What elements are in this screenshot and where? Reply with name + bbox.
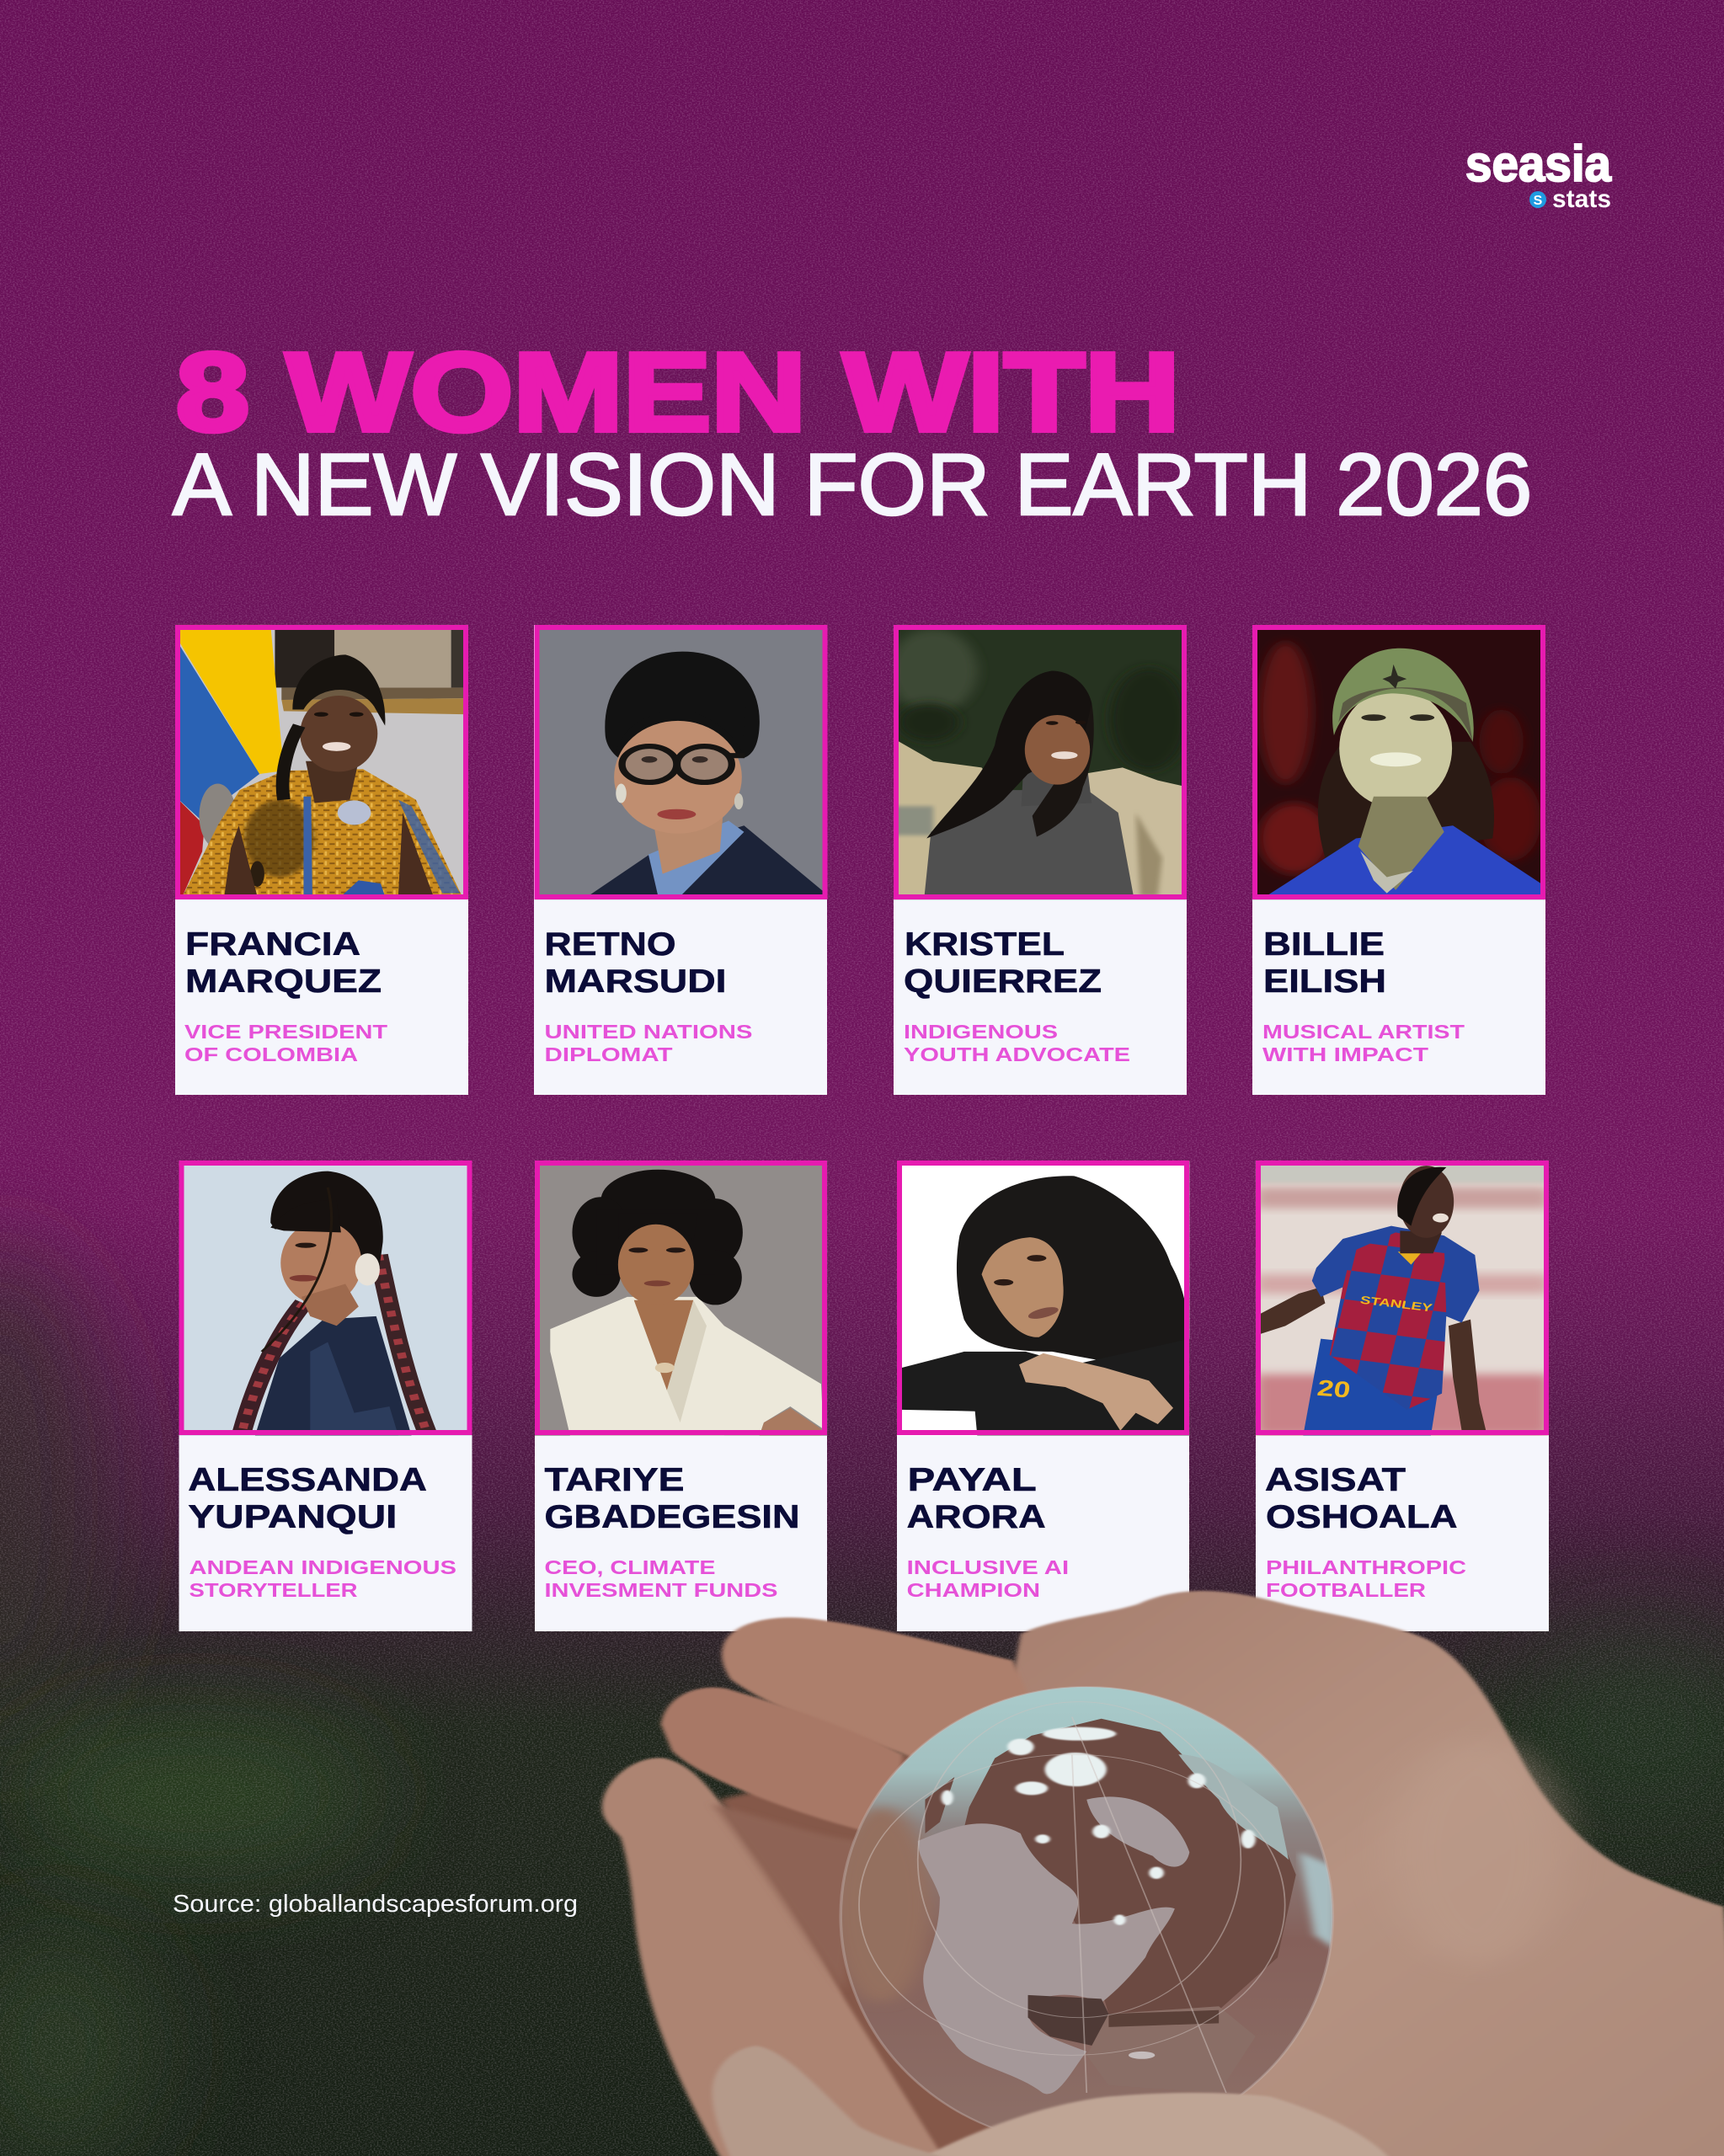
icon: lower palm over globe xyxy=(925,2093,1388,2156)
role line 2: OF COLOMBIA xyxy=(184,1043,358,1065)
role: INCLUSIVE AI xyxy=(907,1556,1069,1578)
role line 2: CHAMPION xyxy=(907,1579,1040,1601)
surname: MARQUEZ xyxy=(185,963,382,1000)
role line 2: STORYTELLER xyxy=(189,1579,358,1601)
name: FRANCIA xyxy=(185,926,360,963)
role: CEO, CLIMATE xyxy=(544,1556,716,1578)
logo: seasia stats: stats xyxy=(1552,185,1611,213)
name: PAYAL xyxy=(908,1462,1037,1498)
surname: OSHOALA xyxy=(1266,1499,1457,1535)
logo: seasia stats: S xyxy=(1534,194,1543,208)
role: UNITED NATIONS xyxy=(544,1021,753,1043)
role: PHILANTHROPIC xyxy=(1266,1556,1466,1578)
icon: glass globe xyxy=(830,1687,1337,2145)
surname: EILISH xyxy=(1263,963,1386,1000)
card: Francia Marquez xyxy=(175,625,469,1095)
role: MUSICAL ARTIST xyxy=(1262,1021,1465,1043)
title: A NEW VISION FOR EARTH 2026 xyxy=(173,436,1532,534)
photo frame xyxy=(1255,627,1543,897)
icon: lower finger xyxy=(602,1758,954,2156)
name: BILLIE xyxy=(1263,926,1385,963)
icon: upper finger xyxy=(722,1618,1028,1762)
surname: MARSUDI xyxy=(544,963,726,1000)
photo: Kristel Quierrez portrait xyxy=(889,625,1188,899)
icon: shadow between fingers and palm xyxy=(719,1694,1057,2156)
icon: thumb xyxy=(713,2046,940,2156)
surname: GBADEGESIN xyxy=(544,1499,800,1535)
photo: Retno Marsudi portrait xyxy=(534,625,827,899)
surname: YUPANQUI xyxy=(188,1499,397,1535)
name: RETNO xyxy=(544,926,675,963)
photo frame xyxy=(1258,1163,1546,1433)
photo: Billie Eilish portrait xyxy=(1252,625,1545,899)
illustration: hands holding glass globe xyxy=(602,1591,1724,2156)
logo: seasia stats xyxy=(1465,136,1612,213)
source: Source: globallandscapesforum.org xyxy=(173,1891,578,1918)
icon: palm highlight xyxy=(1388,1739,1564,1965)
role line 2: FOOTBALLER xyxy=(1266,1579,1426,1601)
role line 2: WITH IMPACT xyxy=(1262,1043,1429,1065)
name: KRISTEL xyxy=(905,926,1065,963)
photo: Asisat Oshoala portrait: STANLEY xyxy=(1359,1294,1434,1315)
card: Alessanda Yupanqui xyxy=(179,1161,472,1631)
card: Payal Arora xyxy=(897,1161,1189,1631)
role line 2: INVESMENT FUNDS xyxy=(544,1579,778,1601)
surname: QUIERREZ xyxy=(904,963,1102,1000)
photo: Asisat Oshoala portrait xyxy=(1256,1161,1549,1436)
photo frame xyxy=(178,627,466,897)
name: ALESSANDA xyxy=(188,1462,427,1498)
photo: Alessanda Yupanqui portrait xyxy=(179,1161,472,1436)
icon: middle finger xyxy=(661,1688,903,1837)
photo frame xyxy=(896,627,1184,897)
photo: Asisat Oshoala portrait: 20 xyxy=(1316,1375,1352,1402)
card: Retno Marsudi xyxy=(534,625,827,1095)
icon: globe rim xyxy=(841,1687,1332,2145)
role: ANDEAN INDIGENOUS xyxy=(189,1556,456,1578)
photo: Francia Marquez portrait xyxy=(175,625,469,899)
photo frame xyxy=(537,627,825,897)
logo: seasia stats: seasia xyxy=(1465,136,1612,192)
photo: Tariye Gbadegesin portrait xyxy=(535,1161,827,1436)
name: TARIYE xyxy=(544,1462,684,1498)
role: VICE PRESIDENT xyxy=(184,1021,388,1043)
role line 2: DIPLOMAT xyxy=(544,1043,673,1065)
card: Kristel Quierrez xyxy=(889,625,1188,1095)
icon: palm and right hand xyxy=(925,1591,1724,2156)
surname: ARORA xyxy=(907,1499,1046,1535)
role line 2: YOUTH ADVOCATE xyxy=(904,1043,1130,1065)
photo frame xyxy=(899,1163,1187,1433)
photo: Payal Arora portrait xyxy=(897,1161,1189,1436)
role: INDIGENOUS xyxy=(904,1021,1058,1043)
photo frame xyxy=(537,1163,825,1433)
title xyxy=(173,330,1532,534)
photo frame xyxy=(182,1163,470,1433)
icon: finger shadow xyxy=(713,1803,859,1991)
card: Billie Eilish xyxy=(1252,625,1545,1095)
card: Tariye Gbadegesin xyxy=(535,1161,827,1631)
title: 8 WOMEN WITH xyxy=(176,330,1180,454)
name: ASISAT xyxy=(1265,1462,1406,1498)
card: Asisat Oshoala xyxy=(1256,1161,1549,1631)
